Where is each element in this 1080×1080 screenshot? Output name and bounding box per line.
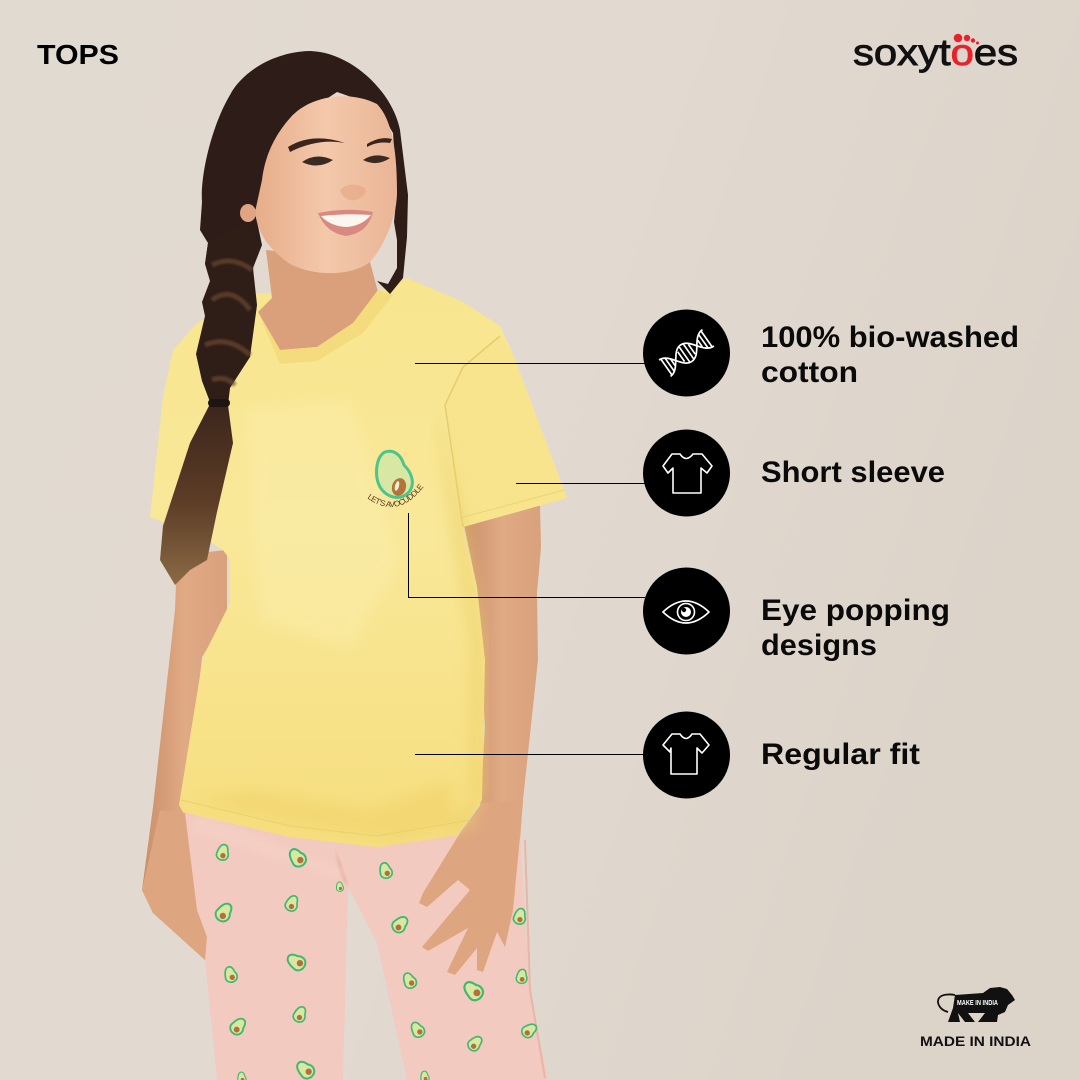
label: 100% bio-washed cotton: 100% bio-washed xyxy=(761,321,1019,354)
right hand xyxy=(419,800,523,975)
hair tie xyxy=(208,399,230,407)
label: eye popping designs: designs xyxy=(761,629,877,662)
face xyxy=(255,96,397,273)
label: eye popping designs: Eye popping xyxy=(761,594,950,627)
back hair xyxy=(200,51,408,294)
nose xyxy=(340,184,366,200)
avocado chest print xyxy=(368,450,424,508)
smile xyxy=(318,210,373,236)
label: short sleeve: Short sleeve xyxy=(761,456,945,489)
left hand xyxy=(142,810,207,960)
label: 100% bio-washed cotton xyxy=(761,321,1019,389)
eyes and brows xyxy=(288,138,392,166)
yellow t-shirt xyxy=(150,278,567,847)
icon: regular fit t-shirt xyxy=(643,712,730,798)
label: 100% bio-washed cotton: cotton xyxy=(761,356,858,389)
pajama pants xyxy=(183,812,548,1080)
heading: tops: TOPS xyxy=(37,39,119,70)
icon: short sleeve t-shirt xyxy=(643,430,730,516)
left arm xyxy=(142,550,227,960)
neck xyxy=(258,250,378,350)
made in india badge xyxy=(920,987,1031,1049)
made in india badge: MADE IN INDIA xyxy=(920,1034,1031,1049)
right arm xyxy=(463,505,541,850)
avocado print xyxy=(213,843,539,1080)
label: eye popping designs xyxy=(761,594,950,662)
ear xyxy=(240,204,256,222)
icon: lion: MAKE IN INDIA xyxy=(957,1000,998,1007)
model illustration xyxy=(142,51,567,1080)
icon: dna xyxy=(643,310,730,396)
print caption: LET'S AVOCUDDLE xyxy=(368,484,424,508)
braid xyxy=(160,225,262,585)
label: regular fit: Regular fit xyxy=(761,738,920,771)
collar xyxy=(258,290,393,364)
icon: eye xyxy=(643,568,730,654)
callout lines xyxy=(408,364,645,754)
hair tail xyxy=(160,402,233,585)
logo: soxytoes: soxyt oes xyxy=(853,32,1018,73)
